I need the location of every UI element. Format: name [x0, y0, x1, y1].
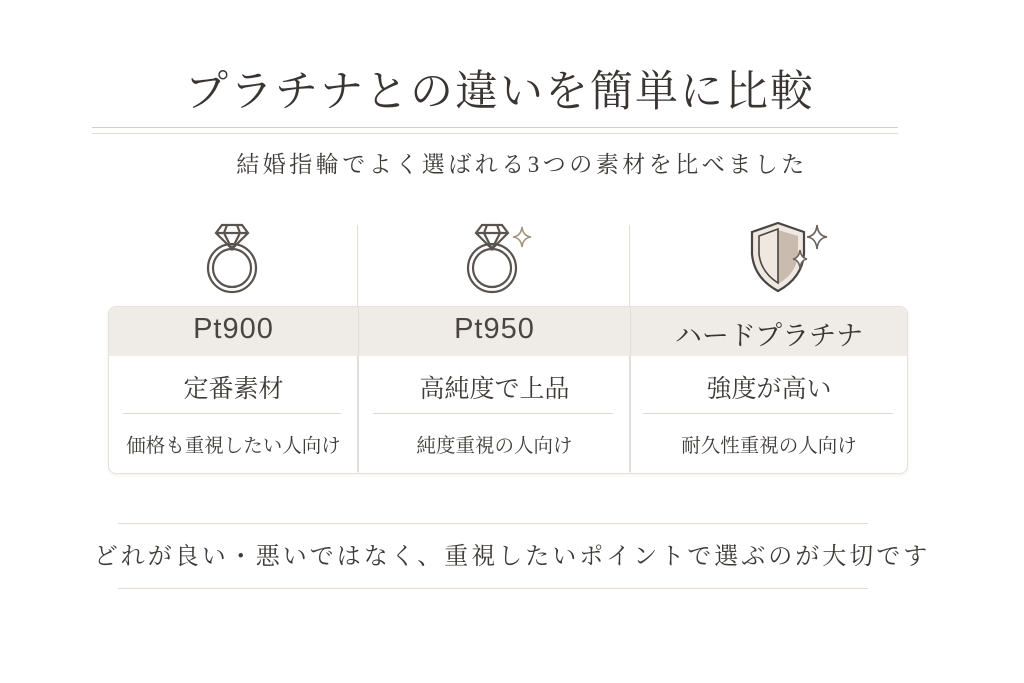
column: hard platinum: 強度が高い: [706, 376, 832, 403]
column: Pt900: Pt900: [193, 313, 274, 345]
conclusion text: どれが良い・悪いではなく、重視したいポイントで選ぶのが大切です: [94, 544, 930, 570]
column dividers: [357, 225, 358, 472]
column: hard platinum: 耐久性重視の人向け: [681, 436, 857, 457]
column: hard platinum: ハードプラチナ: [675, 321, 863, 351]
column: Pt950: [373, 313, 613, 457]
header band: [109, 307, 907, 356]
icon: ring: [206, 224, 258, 294]
icon: shield with sparkles: [750, 222, 828, 292]
column: Pt950: 高純度で上品: [419, 376, 570, 403]
column: Pt950: Pt950: [454, 313, 535, 345]
column: Pt900: 定番素材: [183, 376, 284, 403]
column: Pt900: 価格も重視したい人向け: [126, 436, 341, 457]
comparison card: [108, 306, 908, 474]
icon: ring with sparkle: [466, 224, 532, 294]
column: Pt900: [123, 313, 341, 457]
column: Pt950: 純度重視の人向け: [416, 436, 572, 457]
title: プラチナとの違いを簡単に比較: [185, 69, 815, 116]
subtitle: 結婚指輪でよく選ばれる3つの素材を比べました: [236, 152, 808, 177]
column: hard platinum: [643, 321, 893, 457]
